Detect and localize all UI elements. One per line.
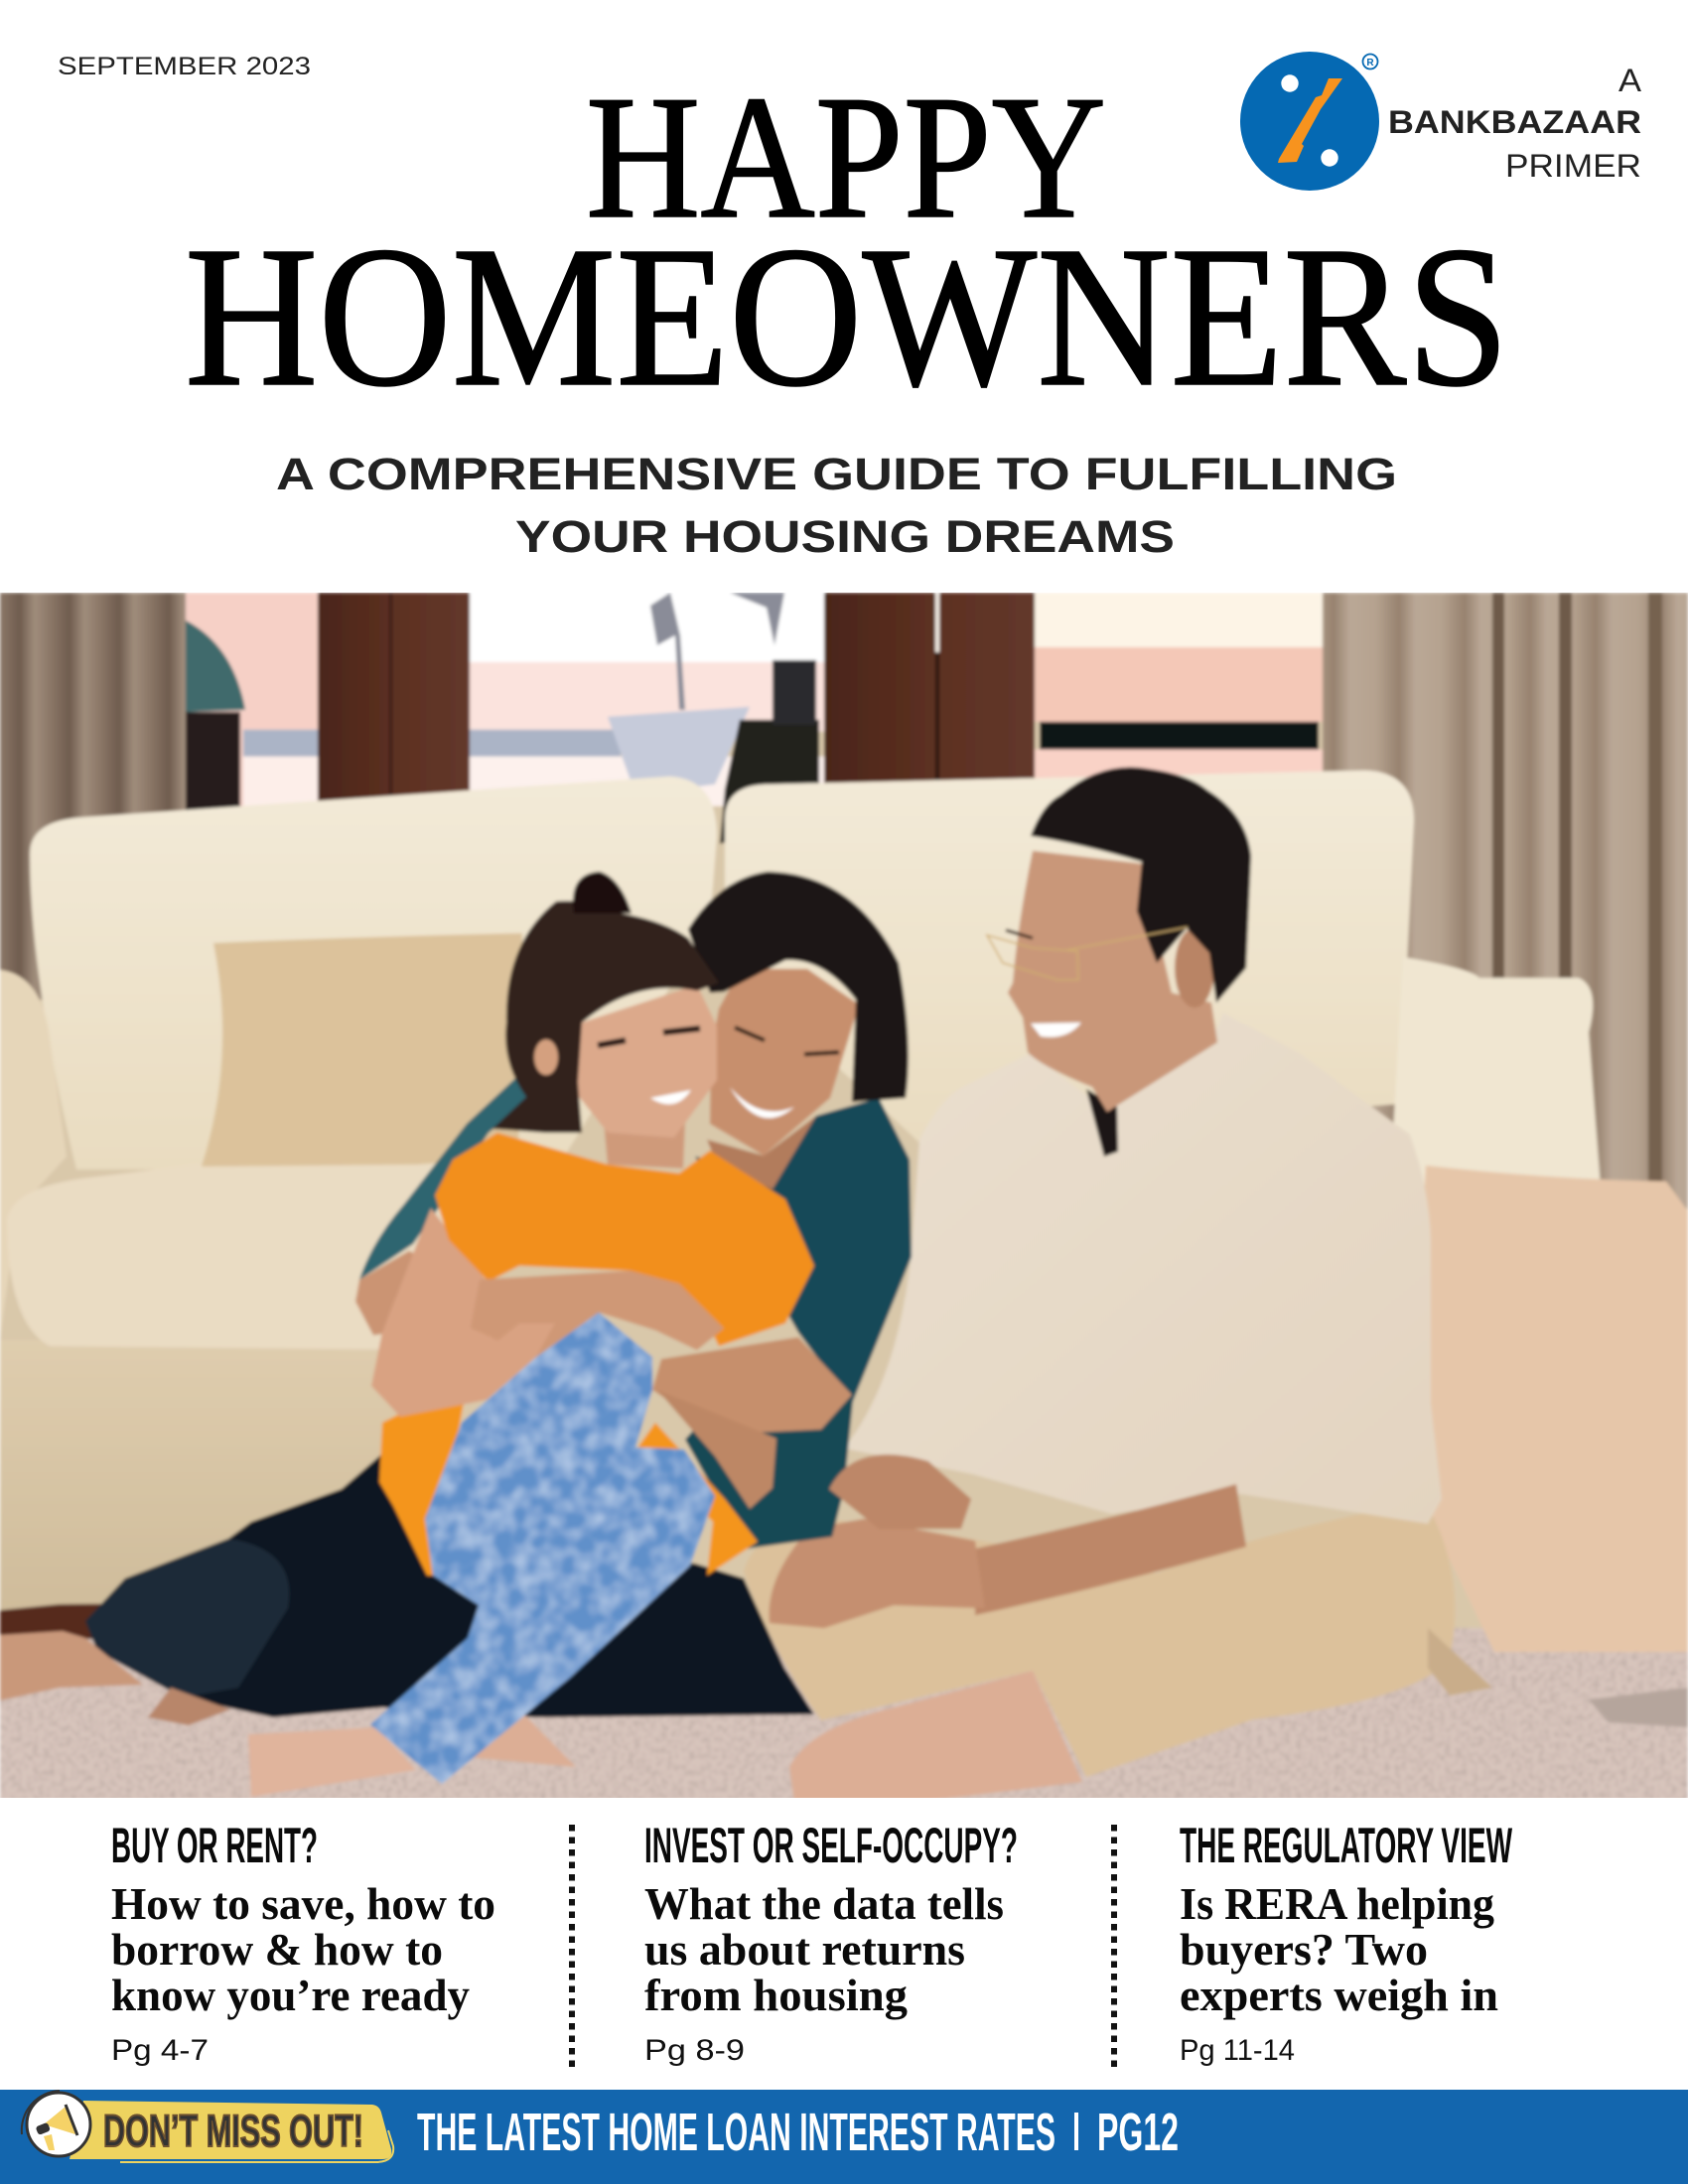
subtitle: [276, 449, 1397, 562]
story column: Invest or self-occupy: from housing: [644, 1970, 908, 2020]
story column: Invest or self-occupy: What the data tells: [644, 1878, 1004, 1929]
story column: Invest or self-occupy: INVEST OR SELF-OCCUPY?: [644, 1818, 1018, 1873]
story column: Invest or self-occupy: us about returns: [644, 1924, 965, 1975]
story column: Invest or self-occupy: [644, 1818, 1018, 2067]
window background: [0, 593, 1688, 1685]
bottom banner: [0, 2090, 1688, 2184]
woman lower body: [0, 1449, 814, 1725]
issue date: SEPTEMBER 2023: [58, 53, 311, 80]
callout: don't miss out: DON’T MISS OUT!: [103, 2106, 363, 2156]
wooden pillars: [316, 593, 1037, 803]
icon: BankBazaar logo: R: [1366, 58, 1374, 68]
carpet: [0, 1628, 1688, 1802]
callout: don't miss out: [22, 2091, 393, 2162]
story column: The regulatory view: [1180, 1818, 1512, 2067]
story column: The regulatory view: Is RERA helping: [1180, 1878, 1494, 1929]
title: HOMEOWNERS: [185, 205, 1509, 428]
story column: Buy or rent: How to save, how to: [111, 1878, 495, 1929]
curtains: [0, 593, 1688, 1208]
man: [744, 767, 1492, 1802]
story column: Buy or rent: [111, 1818, 495, 2067]
brand text: [1388, 63, 1642, 184]
story column: Buy or rent: Pg 4-7: [111, 2034, 209, 2067]
story column: Buy or rent: borrow & how to: [111, 1924, 443, 1975]
banner headline: THE LATEST HOME LOAN INTEREST RATES: [417, 2103, 1055, 2162]
icon: BankBazaar logo: [1240, 52, 1379, 191]
subtitle: A COMPREHENSIVE GUIDE TO FULFILLING: [276, 449, 1397, 499]
brand text: A: [1618, 63, 1642, 98]
icon: megaphone: [36, 2105, 77, 2150]
brand text: PRIMER: [1505, 148, 1641, 184]
subtitle: YOUR HOUSING DREAMS: [515, 511, 1175, 562]
banner headline: PG12: [1097, 2103, 1179, 2162]
story column: The regulatory view: buyers? Two: [1180, 1924, 1428, 1975]
girl: [248, 872, 814, 1797]
brand text: BANKBAZAAR: [1388, 104, 1641, 140]
woman: [355, 872, 971, 1549]
title: HAPPY: [586, 59, 1106, 255]
sofa: [0, 770, 1688, 1727]
family photo illustration: [0, 593, 1688, 1802]
story column: Buy or rent: BUY OR RENT?: [111, 1818, 318, 1873]
story column: Buy or rent: know you’re ready: [111, 1970, 470, 2020]
story column: The regulatory view: Pg 11-14: [1180, 2034, 1295, 2067]
banner headline: [417, 2103, 1179, 2162]
story column: Invest or self-occupy: Pg 8-9: [644, 2034, 745, 2067]
story column: The regulatory view: experts weigh in: [1180, 1970, 1498, 2020]
title: [185, 59, 1509, 428]
